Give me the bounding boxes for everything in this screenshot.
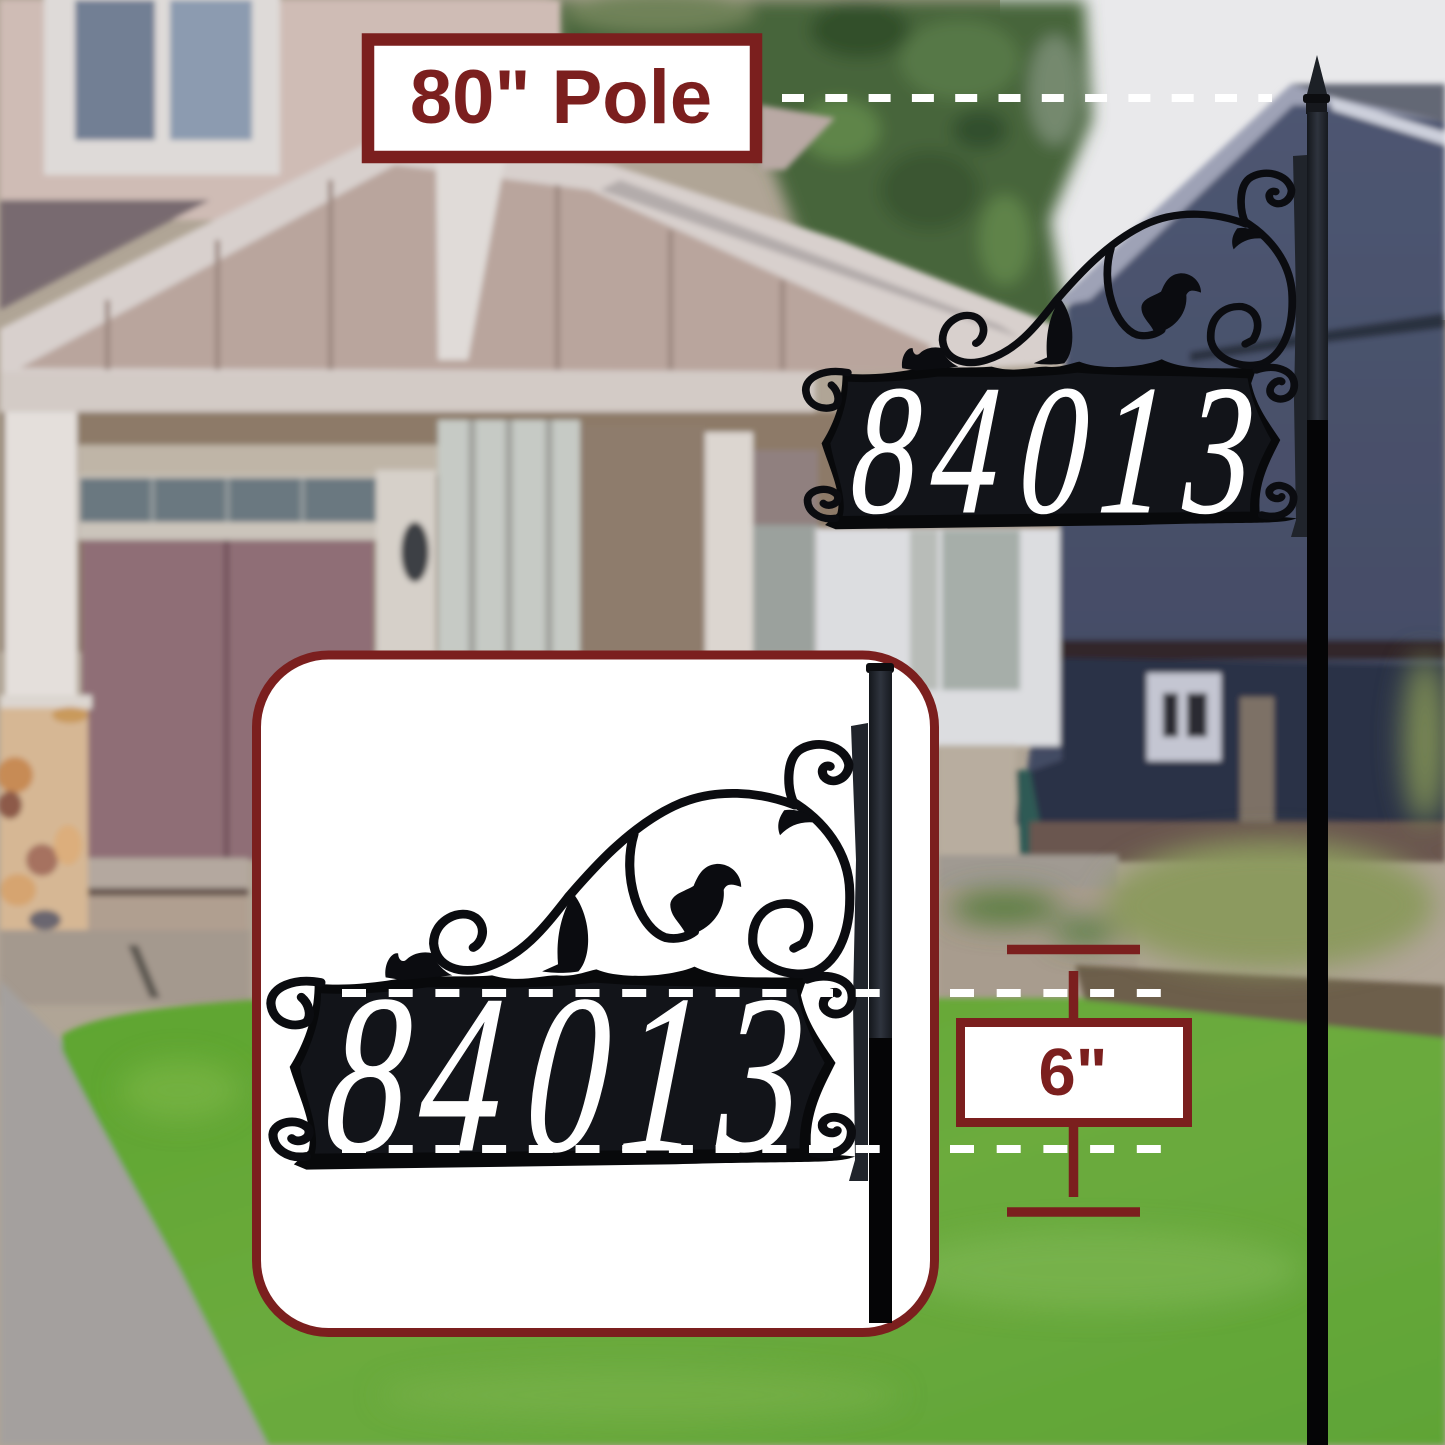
- inset dashed guides: [342, 993, 882, 1149]
- label: 80 inch pole: [368, 40, 756, 157]
- inset sign numbers: 84013: [319, 948, 812, 1199]
- inset pole: [849, 663, 894, 1323]
- dimension: 6 inch height: [950, 950, 1188, 1212]
- sidewalk and lawn: [0, 965, 1445, 1445]
- left house and porch: [0, 0, 1130, 1005]
- bracket plate: [1291, 155, 1307, 537]
- main address sign: [806, 173, 1297, 552]
- inset sign: [271, 744, 855, 1199]
- tree behind the house: [555, 0, 1092, 340]
- right house and side yard: [815, 84, 1445, 1003]
- label: 80 inch pole: 80" Pole: [410, 55, 712, 140]
- main pole with spike: [1303, 55, 1330, 1445]
- inset panel: sign close-up: [256, 655, 934, 1332]
- pole height dashed line: [782, 94, 1272, 102]
- main sign numbers: 84013: [846, 347, 1260, 552]
- lawn highlights and shrubs: [120, 655, 1445, 1421]
- label: 6 inch: 6": [1038, 1035, 1108, 1110]
- label: 6 inch: [960, 1022, 1188, 1122]
